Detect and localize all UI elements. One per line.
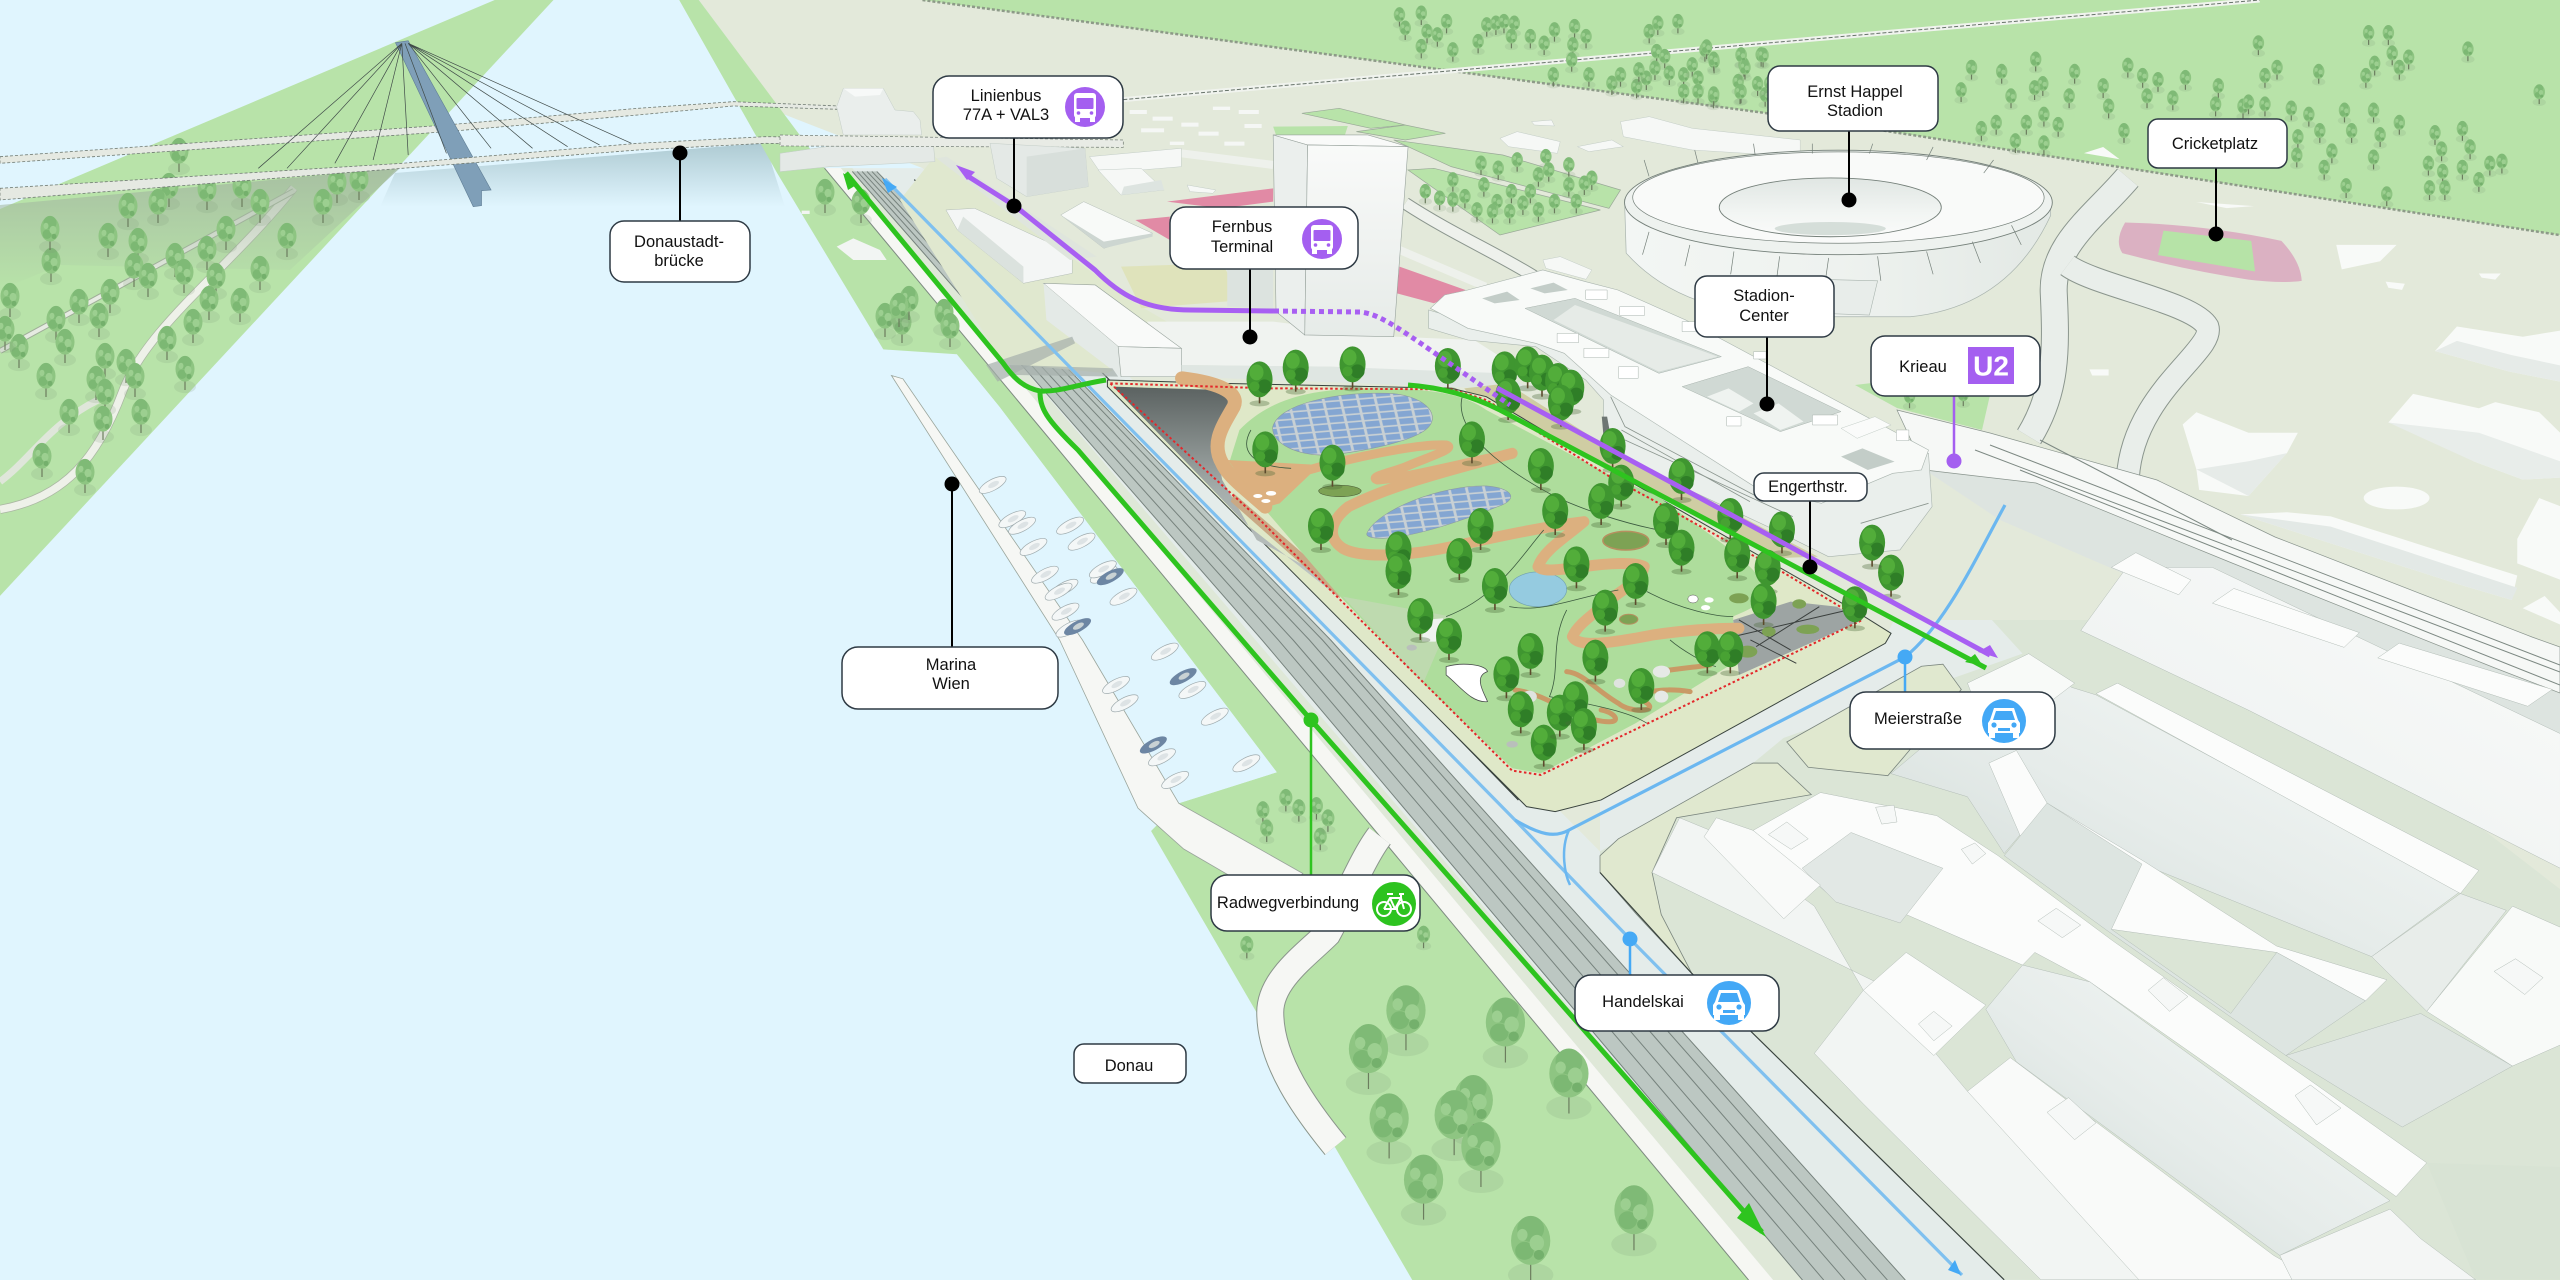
pond	[1509, 572, 1567, 607]
label: Meierstrasse	[1850, 650, 2055, 749]
olive strip beside the route	[1464, 383, 1818, 558]
green cycle routes	[843, 173, 1986, 1237]
plaza	[1733, 602, 1862, 675]
park trees	[1247, 346, 1904, 770]
label: Stadion-Center: Stadion-	[1733, 287, 1795, 305]
label: Ernst Happel Stadion: Stadion	[1827, 102, 1883, 120]
label: Fernbus Terminal	[1170, 207, 1358, 344]
label: Stadion-Center	[1695, 276, 1834, 412]
facade hatch	[1231, 493, 1340, 598]
Stadion-Center	[1429, 270, 1932, 558]
timber paths	[1182, 378, 1739, 722]
label: Krieau U2: Krieau	[1899, 358, 1947, 376]
blue road routes	[882, 178, 2005, 1275]
label: Engerthstrasse: Engerthstr.	[1768, 478, 1848, 496]
site boundary	[1110, 383, 1862, 775]
blue arrowhead north	[882, 178, 897, 193]
label: Donau	[1074, 1044, 1186, 1083]
solar dome south	[1367, 486, 1511, 538]
far bank trees	[0, 138, 370, 496]
label: Cricketplatz	[2148, 119, 2287, 242]
purple arrowhead east	[1978, 645, 1998, 658]
label: Handelskai: Handelskai	[1602, 993, 1684, 1011]
Meierstrasse road band and building plots	[1600, 620, 2560, 1280]
label: Radwegverbindung: Radwegverbindung	[1217, 894, 1359, 912]
blue arrowhead south	[1948, 1260, 1961, 1275]
label: Fernbus Terminal: Terminal	[1211, 238, 1273, 256]
green arrowhead south	[1737, 1203, 1766, 1237]
far river bank island	[0, 0, 553, 596]
label: Krieau U2	[1871, 336, 2040, 468]
green arrowhead east	[1965, 654, 1983, 666]
bridgehead and lane buildings	[780, 88, 1123, 260]
label: Donaustadtbruecke: brücke	[654, 252, 704, 270]
label: Linienbus: 77A + VAL3	[963, 106, 1049, 124]
park base plot	[1107, 380, 1891, 812]
label: Donaustadtbruecke	[610, 146, 750, 282]
north district: green plots, pink pads and small buildings	[900, 107, 1800, 373]
trees in the green plot beside the tower	[1419, 149, 1598, 225]
label: Donaustadtbruecke: Donaustadt-	[634, 233, 724, 251]
main land, fields and river corridor	[679, 0, 2560, 1280]
label: Linienbus: Linienbus	[971, 87, 1041, 105]
park footpaths	[1247, 393, 1733, 723]
back deck	[0, 102, 839, 163]
front deck	[0, 137, 1000, 200]
label: Meierstrasse: Meierstraße	[1874, 710, 1962, 728]
label: Cricketplatz: Cricketplatz	[2172, 135, 2258, 153]
east district road network and small houses	[2029, 147, 2560, 625]
label: Stadion-Center: Center	[1739, 307, 1789, 325]
label: Handelskai	[1575, 932, 1779, 1031]
park site	[1107, 346, 1904, 812]
bridge shadow on island	[0, 168, 400, 290]
purple arrowhead north	[956, 165, 975, 180]
label: Radwegverbindung	[1211, 712, 1420, 931]
park lawn	[1228, 388, 1765, 773]
retaining wall	[1113, 387, 1340, 598]
label: Ernst Happel Stadion	[1768, 66, 1938, 208]
solar dome north	[1273, 393, 1432, 455]
label: Fernbus Terminal: Fernbus	[1212, 218, 1272, 236]
label: Donau: Donau	[1105, 1057, 1153, 1075]
green arrowhead north	[843, 173, 858, 190]
label: Engerthstrasse	[1754, 473, 1867, 574]
bridge shadow on water	[380, 143, 785, 207]
label: Marina Wien: Wien	[932, 675, 970, 693]
Ernst Happel Stadion	[1625, 144, 2052, 317]
label: Ernst Happel Stadion: Ernst Happel	[1807, 83, 1903, 101]
purple bus route	[956, 165, 1998, 658]
label: Krieau U2: U2	[1973, 350, 2009, 382]
marina boats	[977, 473, 1262, 792]
rail viaduct Krieau	[1855, 380, 2560, 750]
label: Marina Wien: Marina	[926, 656, 977, 674]
label: Marina Wien	[842, 476, 1058, 709]
bridge pylon	[395, 41, 491, 207]
residential blocks, lower right	[1652, 553, 2560, 1280]
label: Linienbus	[933, 76, 1123, 214]
upper field trees	[1393, 5, 2546, 208]
planter ovals and boulders	[1253, 485, 1819, 748]
bridge cables	[258, 43, 631, 168]
bridge: Donaustadtbruecke	[0, 41, 1000, 207]
high-rise tower, Fernbus terminal and plaza	[986, 135, 1532, 390]
corridor trees on the near bank	[814, 179, 1657, 1280]
